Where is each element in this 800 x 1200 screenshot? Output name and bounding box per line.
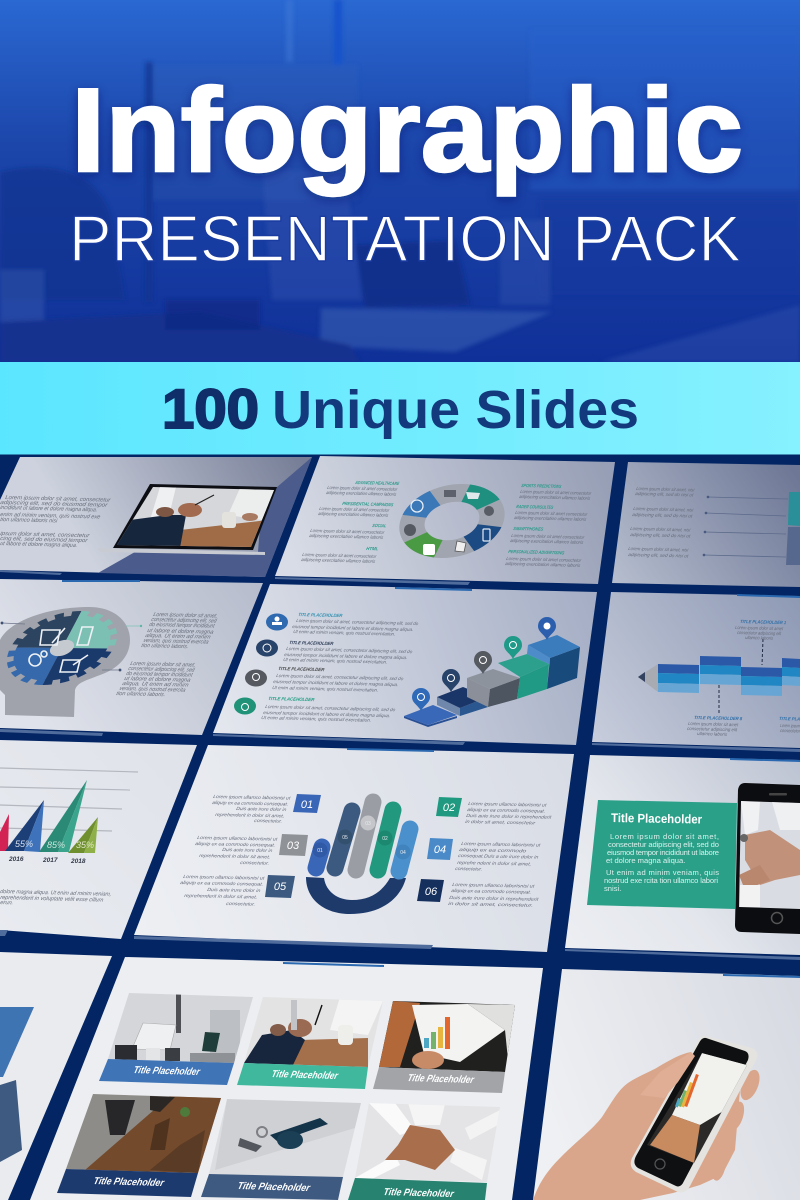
numbered boxes: 03 [287,840,300,852]
text block: Lorem ipsum dolor sit amet, [152,612,218,620]
list text: Lorem ipsum dolor sit amet, consectetur adipiscing elit, sed do [286,646,413,654]
right text blocks: aliquip ex ea commodo [459,847,527,853]
right labels: RADER COUNSULTES [516,504,554,510]
list text: TITLE PLACEHOLDER [268,696,315,702]
grid lines [0,768,138,831]
slide: triangle bar chart [0,740,197,939]
numbered boxes: 05 [274,881,287,893]
subtitle: Presentation Pack: PRESENTATION PACK [69,203,741,275]
left text blocks [180,794,292,907]
numbered boxes: 06 [425,886,438,898]
dark photo corner [98,457,312,577]
hand shaped chart: 04 [400,850,406,856]
slide: timeline list at right edge [612,462,800,587]
triangle bars: 85% [47,840,65,850]
left labels: adipiscing exercitation ullamco laboris [326,490,397,497]
title: Infographic: Infographic [71,64,743,197]
year labels: 2016 [8,856,24,863]
left text blocks: Lorem ipsum ullamco laborisnisi ut [197,835,279,842]
phone body [631,1036,757,1192]
list text: eiusmod tempor incididunt ut labore et dolore magna aliqua. [263,710,391,718]
text block: consectetur adipiscing elit, sed [150,617,218,625]
text block: incididunt ut labore et dolore magna aliqua. [0,505,98,513]
labels: ullamco laboris [697,731,728,737]
right labels: adipiscing exercitation ullamco laboris [510,538,584,545]
right text blocks: aliquip ex ea commodo consequat. [467,807,546,814]
left text blocks: aliquip ex ea commodo consequat. [180,880,264,887]
right labels [505,483,592,568]
labels: consectetur adipiscing elit [687,726,738,732]
card: desk with suit [237,995,390,1089]
left labels: ADVANCED HEALTHCARE [354,480,400,486]
right text blocks: Duis aute irure dolor in reprehenderit [466,813,553,820]
numbered boxes: 02 [443,802,455,814]
text block: adipiscing elit, sed do nisi ut [632,512,694,519]
card: office [99,990,260,1085]
slide: head with gears [0,579,263,735]
slide: puzzle ring [275,456,615,584]
right labels: Lorem ipsum dolor sit amet consectetur [515,510,588,517]
left labels: SOCIAL [372,523,387,528]
caption [0,889,112,906]
right text blocks: Lorem ipsum ullamco laborisnisi ut [461,841,542,848]
text block: adipiscing elit, sed do nisi ut [635,491,695,497]
text block: tion ullamco laboris nisi [0,517,59,524]
labels: ullamco laboris [745,635,774,641]
left text blocks: aliquip ex ea commodo consequat. [212,800,289,807]
text block [115,612,218,698]
left text blocks: aliquip ex ea commodo consequat. [195,841,276,848]
text block: Lorem ipsum dolor sit amet, consectetur [5,495,112,504]
text block: Lorem ipsum dolor sit amet, nisi [633,506,695,513]
left text blocks: Lorem ipsum ullamco laborisnisi ut [213,794,292,801]
map pins [412,617,556,711]
list text: Lorem ipsum dolor sit amet, consectetur adipiscing elit, sed do [265,704,396,712]
right labels: adipiscing exercitation ullamco laboris [519,494,591,501]
slide: teal card and phone [565,755,800,955]
text block: aliqua. Ut enim ad minim [144,633,211,641]
text block: adipiscing elit, sed do nisi ut [628,552,690,559]
puzzle donut chart [398,488,506,554]
left text blocks: consectetur. [240,860,270,866]
card: headphones: Title Placeholder [236,1181,312,1194]
phone [735,783,800,934]
triangle bars [0,780,98,853]
card: desk with suit: Title Placeholder [270,1069,340,1082]
right text blocks: in dolor sit amet, consectetur. [448,901,534,908]
colour boxes [786,492,800,565]
teal text card: eiusmod tempor incididunt ut labore [607,848,719,857]
left labels: HTML [366,546,379,551]
lines and dots [703,496,788,557]
teal text card: Title Placeholder [611,811,702,827]
list text: eiusmod tempor incididunt ut labore et dolore magna aliqua. [273,679,399,687]
teal text card: consectetur adipiscing elit, sed do [608,840,719,849]
title block [69,64,743,275]
slide: laptop and text [0,457,312,577]
right text blocks: Lorem ipsum ullamco laborisnisi ut [452,882,536,889]
card: team hands [348,1100,505,1200]
text block: ipsum dolor sit amet, consectetur [0,531,91,539]
teal text card [587,800,737,909]
right text blocks: Lorem ipsum ullamco laborisnisi ut [468,801,548,808]
banner: 100 Unique Slides: Unique Slides [272,380,639,440]
caption: erun. [0,900,14,906]
gear icons [29,627,93,672]
list text: eiusmod tempor incididunt ut labore et dolore magna aliqua. [284,652,408,660]
right text blocks: Duis aute irure dolor in reprehenderit [449,895,540,902]
card: notebook chart: Title Placeholder [406,1073,476,1086]
text block: aliqua. Ut enim ad minim [121,681,189,689]
text block [0,495,112,549]
right text blocks: aliquip ex ea commodo consequat. [451,888,532,895]
left labels: Lorem ipsum dolor sit amet consectetur [327,485,398,492]
card: wood table: Title Placeholder [92,1176,166,1189]
text block: do eiusmod tempor incididunt [125,671,194,679]
list icons [234,614,288,714]
text block: Lorem ipsum dolor sit amet, nisi [636,486,696,492]
thumb [640,1052,695,1098]
banner: 100 Unique Slides: 100 [162,377,259,440]
caption: dolore magna aliqua. Ut enim ad minim veniam, [0,889,112,898]
left labels: Lorem ipsum dolor sit amet consectetur [302,552,377,559]
list text: TITLE PLACEHOLDER [289,640,334,646]
teal text card: Lorem ipsum dolor sit amet, [610,832,719,841]
labels: Lorem ipsum dolor sit amet [735,625,784,631]
numbered boxes [265,794,462,902]
list text: Ut enim ad minim veniam, quis nostrud exercitation. [272,685,379,693]
callout connectors [1,622,142,671]
list text: TITLE PLACEHOLDER [298,612,343,618]
text block: do eiusmod tempor incididunt [148,622,216,630]
list text: TITLE PLACEHOLDER [278,666,325,672]
right labels: adipiscing exercitation ullamco laboris [505,561,581,568]
slide: hand holding phone [533,969,800,1200]
text block: ut labore et dolore magna aliqua. [0,541,78,549]
list text: eiusmod tempor incididunt ut labore et dolore magna aliqua. [292,624,414,632]
hand [533,1052,763,1200]
blue block [0,1007,34,1077]
labels: TITLE PLACEHOLDER 1 [740,619,787,625]
dashed connectors [719,639,763,713]
labels [687,619,800,737]
text block: adipiscing elit, sed do eiusmod tempor [0,500,109,509]
text block: consectetur adipiscing elit, sed [127,666,196,674]
right labels: Lorem ipsum dolor sit amet consectetur [506,556,582,563]
hand shaped chart: 02 [382,836,388,842]
left labels: adipiscing exercitation ullamco laboris [309,533,384,540]
slide: staircase list [213,584,597,745]
banner: 100 Unique Slides [0,362,800,454]
year labels: 2017 [42,857,58,864]
hand shaped chart [306,802,410,914]
slide accent strips [0,570,800,978]
slide: photo grid [30,957,543,1200]
text block: veniam, quis nostrud exercita [142,638,209,646]
left text blocks: consectetur. [254,818,283,824]
year labels: 2018 [70,858,86,865]
left labels: Lorem ipsum dolor sit amet consectetur [319,506,390,513]
text block: tion ullamco laboris. [140,643,189,650]
list text: Lorem ipsum dolor sit amet, consectetur adipiscing elit, sed do [276,673,404,681]
left labels [301,480,400,564]
hand shaped chart: 01 [317,848,323,854]
text block: tion ullamco laboris. [115,691,166,698]
right labels: SPORTS PREDICTIONS [521,483,562,489]
triangle bars: 35% [76,840,94,850]
card: office: Title Placeholder [132,1065,202,1078]
left text blocks: Duis aute irure dolor in [236,806,287,812]
text block: Lorem ipsum dolor sit amet, nisi [630,526,692,533]
left text blocks: Duis aute irure dolor in [207,887,261,893]
list text: Ut enim ad minim veniam, quis nostrud exercitation. [293,629,396,637]
left labels: adipiscing exercitation ullamco laboris [301,557,376,564]
text block: veniam, quis nostrud exercita [118,686,186,694]
left text blocks: consectetur. [226,901,256,907]
numbered boxes: 01 [301,799,313,811]
right labels: adipiscing exercitation ullamco laboris [514,515,587,522]
hand shaped chart: 05 [342,835,348,841]
left labels: PRESIDENTIAL CAMPAIGNS [342,501,395,507]
header: blurred office photo background [0,0,800,362]
list text [261,612,419,723]
card: wood table [57,1090,230,1197]
left text blocks: reprehenderit in dolor sit amet, [184,893,258,899]
text block: Lorem ipsum dolor sit amet, nisi [628,546,690,553]
slide: edge blocks [0,952,112,1200]
right labels: SMARTPHONES [513,526,545,532]
caption: reprehenderit in voluptate velit esse cillum [0,895,104,904]
list text: Lorem ipsum dolor sit amet, consectetur adipiscing elit, sed do [296,618,419,626]
slide: pencil timeline [592,592,800,748]
slide wall background [0,454,800,1200]
teal text card: nostrud exe rcita tion ullamco labori [604,876,718,885]
laptop [97,484,280,555]
head silhouette [0,607,130,717]
teal text card: et dolore magna aliqua. [606,856,685,865]
right labels: Lorem ipsum dolor sit amet consectetur [520,489,592,496]
right text blocks: consequat.Duis a ute irure dolor in [458,853,539,860]
hand shaped chart: 03 [365,821,371,827]
year labels [8,856,86,865]
text block: ut labore et dolore magna [123,676,191,684]
text block: Lorem ipsum dolor sit amet, [129,661,196,669]
text block: ut labore et dolore magna [146,628,214,636]
card: team hands: Title Placeholder [382,1187,456,1200]
slate block [0,1080,22,1162]
left text blocks: reprehenderit in dolor sit amet, [199,853,271,859]
list text: Ut enim ad minim veniam, quis nostrud exercitation. [283,657,388,665]
teal text card: Ut enim ad minim veniam, quis [606,868,719,877]
left labels: Lorem ipsum dolor sit amet consectetur [310,528,385,535]
card: notebook chart [373,998,520,1093]
left text blocks: Lorem ipsum ullamco laborisnisi ut [183,874,266,881]
ring icons [404,490,494,555]
pencil chart [638,656,800,696]
text block: enim ad minim veniam, quis nostrud exe [0,512,101,520]
right labels: Lorem ipsum dolor sit amet consectetur [511,533,585,540]
text block: adipiscing elit, sed do nisi ut [630,532,692,539]
right text blocks: consectetur. [455,866,483,872]
right text blocks: reprehe ndent in dolor sit amet, [457,860,532,866]
teal text card: snisi. [604,884,621,893]
labels: TITLE PLACEHOLDER 8 [694,715,743,721]
left text blocks: reprehenderit in dolor sit amet, [215,812,285,818]
right labels: PERSONALIZED ADVERTISING [508,549,565,555]
text block [628,486,696,559]
gear quadrants [0,614,127,682]
labels: Lorem ipsum dolor sit amet [688,721,739,727]
labels: consectetur adipiscing elit [737,630,782,636]
list text: Ut enim ad minim veniam, quis nostrud exercitation. [261,715,372,723]
3D staircase chart [404,635,580,727]
numbered boxes: 04 [434,844,446,856]
slide: hand chart [134,745,574,952]
left text blocks: Duis aute irure dolor in [222,847,273,853]
card: headphones [201,1096,365,1200]
text block: cing elit, sed do eiusmod tempor [0,536,89,544]
triangle bars: 55% [15,839,33,849]
left labels: adipiscing exercitation ullamco laboris [318,511,389,518]
right text blocks [448,801,553,908]
right text blocks: in dolor sit amet, consectetur [465,819,536,825]
